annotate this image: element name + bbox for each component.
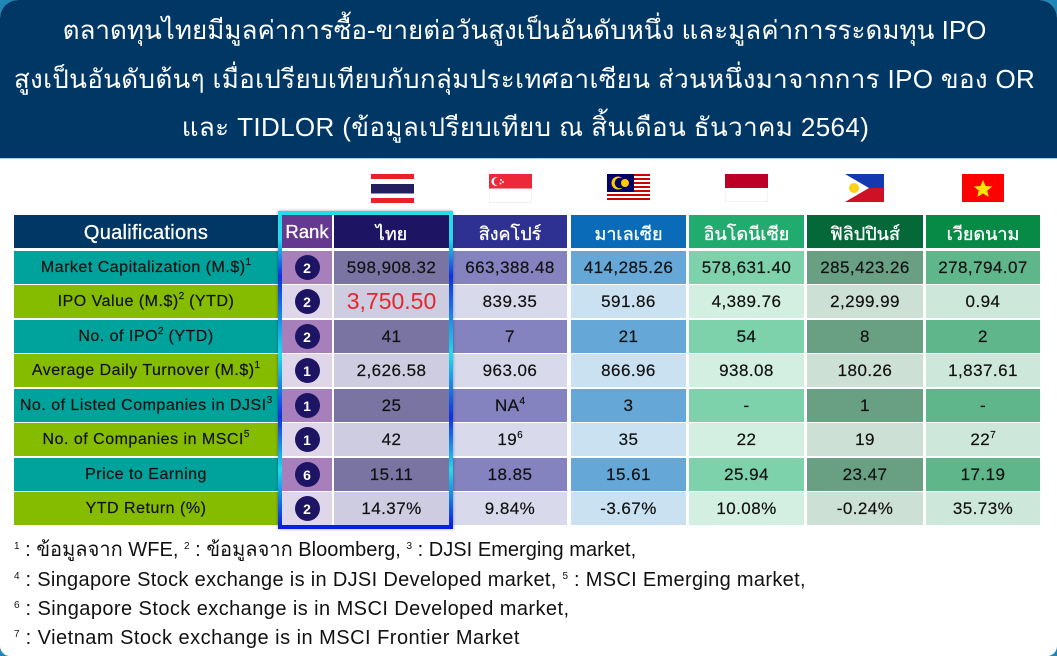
header: Vietnam: เวียดนาม — [947, 224, 1019, 244]
flag: Malaysia — [607, 174, 650, 200]
row: Price to Earning: 18.85 — [488, 464, 532, 484]
row: IPO Value: 4,389.76 — [712, 292, 781, 310]
row: No. of IPO: 7 — [505, 326, 515, 346]
header: Singapore: สิงคโปร์ — [479, 224, 541, 244]
header: Thailand: ไทย — [376, 224, 407, 244]
row: Companies in MSCI: 22 — [737, 430, 756, 448]
row: YTD Return: 9.84% — [485, 498, 535, 518]
header: Rank — [282, 215, 332, 248]
row: YTD Return: YTD Return (%) — [86, 500, 206, 516]
row: IPO Value: 0.94 — [966, 292, 1000, 310]
row: Market Capitalization: 663,388.48 — [465, 258, 555, 276]
row: Price to Earning: 15.61 — [606, 464, 651, 484]
header: Qualifications — [14, 215, 278, 248]
row: IPO Value: 3,750.50 — [347, 288, 436, 314]
row: YTD Return — [14, 492, 1040, 525]
row: IPO Value — [14, 285, 1040, 318]
row: Market Capitalization: 414,285.26 — [584, 258, 673, 276]
row: Average Daily Turnover: 938.08 — [719, 360, 774, 380]
footnote 6: 6 : Singapore Stock exchange is in MSCI Developed market, — [14, 598, 569, 620]
row: Market Capitalization: 2 — [303, 260, 311, 276]
row: IPO Value: 2,299.99 — [830, 292, 900, 310]
footnotes — [14, 539, 806, 649]
row: Price to Earning: 23.47 — [843, 464, 887, 484]
row: Market Capitalization: 598,908.32 — [347, 258, 436, 276]
row: YTD Return: -0.24% — [837, 498, 893, 518]
header: Rank: Rank — [285, 221, 329, 242]
row: YTD Return: 10.08% — [716, 498, 777, 518]
row: IPO Value: IPO Value (M.$)2 (YTD) — [58, 290, 234, 310]
header: Singapore — [453, 215, 567, 248]
row: Listed Companies in DJSI: - — [980, 396, 986, 414]
row: No. of IPO: 54 — [737, 326, 756, 346]
flag: Indonesia — [725, 174, 768, 202]
row: IPO Value: 839.35 — [483, 292, 537, 310]
row: Companies in MSCI: 1 — [303, 432, 311, 448]
row: Price to Earning: 15.11 — [370, 464, 413, 484]
row: Listed Companies in DJSI: 3 — [624, 396, 633, 414]
row: Average Daily Turnover: Average Daily Turnover (M.$)1 — [32, 360, 260, 378]
row: Price to Earning — [14, 458, 1040, 491]
row: Price to Earning: 6 — [303, 466, 311, 482]
row: Average Daily Turnover: 1,837.61 — [948, 360, 1018, 380]
row: Average Daily Turnover: 180.26 — [838, 360, 892, 380]
row: Market Capitalization — [14, 251, 1040, 284]
comparison table — [14, 215, 1040, 525]
row: Listed Companies in DJSI: 25 — [382, 396, 401, 414]
title line 2: สูงเป็นอันดับต้นๆ เมื่อเปรียบเทียบกับกลุ่มประเทศอาเซียน ส่วนหนึ่งมาจากการ IPO ของ OR — [14, 64, 1035, 94]
footnote 1-3: 1 : ข้อมูลจาก WFE, 2 : ข้อมูลจาก Bloomberg, 3 : DJSI Emerging market, — [14, 539, 636, 561]
row: Companies in MSCI: 19 — [855, 430, 875, 448]
row: Listed Companies in DJSI: NA4 — [495, 396, 525, 414]
row: No. of IPO: 41 — [382, 326, 401, 346]
footnote 4-5: 4 : Singapore Stock exchange is in DJSI Developed market, 5 : MSCI Emerging market, — [14, 569, 806, 591]
row: Market Capitalization: Market Capitalization (M.$)1 — [41, 256, 251, 276]
row: No. of IPO: No. of IPO2 (YTD) — [78, 326, 214, 344]
footnote 7: 7 : Vietnam Stock exchange is in MSCI Frontier Market — [14, 627, 520, 649]
title banner — [0, 0, 1057, 159]
title line 1: ตลาดทุนไทยมีมูลค่าการซื้อ-ขายต่อวันสูงเป็นอันดับหนึ่ง และมูลค่าการระดมทุน IPO — [63, 15, 986, 45]
row: Market Capitalization: 285,423.26 — [820, 258, 910, 276]
header: Malaysia: มาเลเซีย — [594, 224, 663, 244]
row: Price to Earning: 25.94 — [724, 464, 769, 484]
row: Listed Companies in DJSI — [14, 389, 1040, 422]
header: Philippines — [807, 215, 923, 248]
flag: Singapore — [489, 174, 532, 203]
header: Indonesia: อินโดนีเซีย — [704, 224, 789, 244]
title line 3: และ TIDLOR (ข้อมูลเปรียบเทียบ ณ สิ้นเดือน ธันวาคม 2564) — [182, 112, 869, 142]
row: YTD Return: 14.37% — [361, 498, 422, 518]
row: Market Capitalization: 278,794.07 — [938, 258, 1028, 276]
row: Companies in MSCI: 35 — [619, 430, 638, 448]
row: Companies in MSCI: 42 — [382, 430, 401, 448]
row: YTD Return: 2 — [303, 500, 311, 516]
row: Price to Earning: Price to Earning — [85, 466, 207, 482]
row: Companies in MSCI: No. of Companies in MSCI5 — [43, 428, 249, 448]
row: Companies in MSCI: 227 — [970, 430, 996, 448]
row: Companies in MSCI: 196 — [497, 430, 523, 448]
flag: Vietnam — [962, 174, 1004, 202]
row: IPO Value: 591.86 — [601, 292, 656, 310]
row: IPO Value: 2 — [303, 294, 311, 310]
row: Companies in MSCI — [14, 423, 1040, 456]
row: Average Daily Turnover: 1 — [303, 362, 311, 378]
row: Listed Companies in DJSI: 1 — [860, 396, 870, 414]
row: Average Daily Turnover: 866.96 — [601, 360, 656, 380]
header: Philippines: ฟิลิปปินส์ — [830, 224, 900, 244]
row: No. of IPO: 21 — [619, 326, 638, 346]
header: Qualifications: Qualifications — [84, 222, 208, 244]
row: Average Daily Turnover: 2,626.58 — [357, 360, 426, 380]
row: Listed Companies in DJSI: 1 — [303, 398, 311, 414]
row: Market Capitalization: 578,631.40 — [702, 258, 791, 276]
flag: Thailand — [371, 174, 414, 203]
flag row — [371, 174, 1004, 203]
row: No. of IPO — [14, 320, 1040, 353]
flag: Philippines — [845, 174, 884, 202]
table header row — [14, 215, 1040, 248]
header: Malaysia — [571, 215, 686, 248]
row: No. of IPO: 8 — [860, 326, 870, 346]
row: No. of IPO: 2 — [303, 328, 311, 344]
header: Vietnam — [926, 215, 1040, 248]
row: Listed Companies in DJSI: No. of Listed Companies in DJSI3 — [20, 394, 272, 414]
row: YTD Return: -3.67% — [600, 498, 657, 518]
row: Average Daily Turnover — [14, 354, 1040, 387]
row: Average Daily Turnover: 963.06 — [483, 360, 537, 380]
row: Price to Earning: 17.19 — [961, 464, 1005, 484]
Thailand highlight frame — [278, 211, 453, 529]
header: Indonesia — [689, 215, 804, 248]
row: YTD Return: 35.73% — [953, 498, 1013, 518]
row: Listed Companies in DJSI: - — [743, 396, 750, 414]
row: No. of IPO: 2 — [978, 326, 988, 346]
header: Thailand — [334, 215, 449, 248]
